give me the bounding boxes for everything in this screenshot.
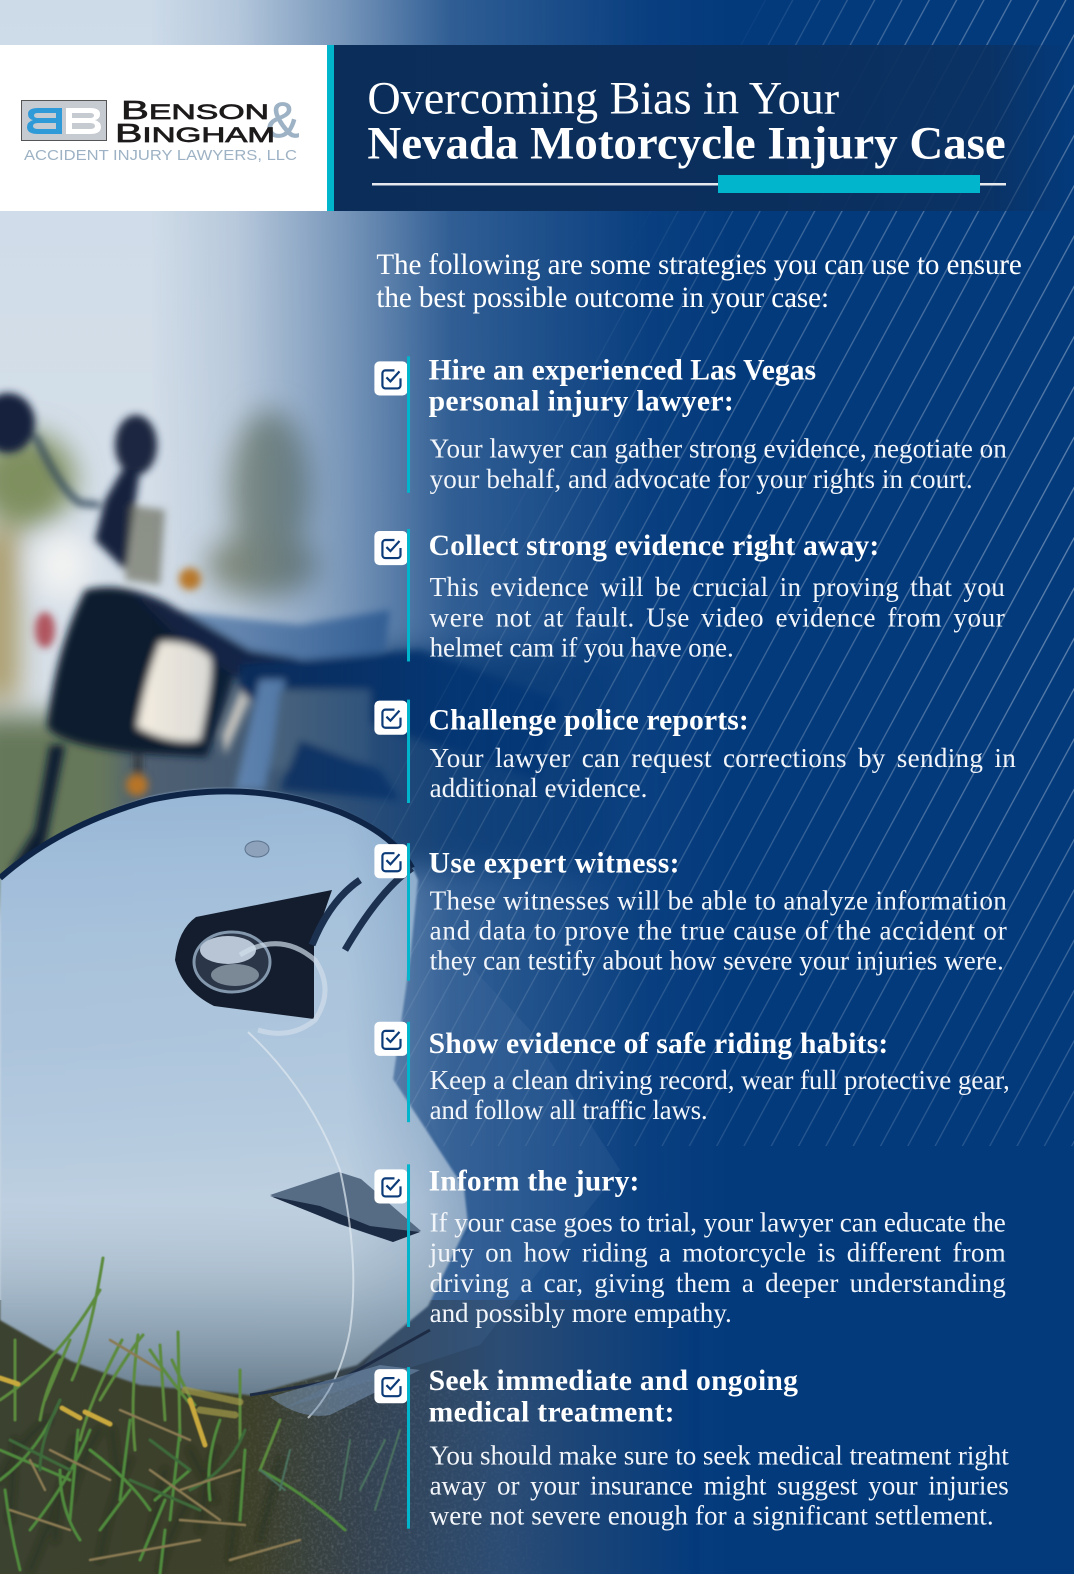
- heading: Show evidence of safe riding habits:: [429, 1028, 888, 1060]
- body text: [430, 1065, 1010, 1125]
- logo mark: [22, 100, 106, 140]
- body text: [430, 743, 1016, 803]
- body text: [429, 1208, 1006, 1328]
- heading: Use expert witness:: [429, 847, 680, 879]
- intro text: [376, 249, 1022, 314]
- photo: helmet: [0, 789, 620, 1418]
- strategy 6: [374, 1164, 1006, 1328]
- icon: checkbox: [374, 844, 408, 878]
- helmet side vent: [270, 1172, 421, 1242]
- icon: checkbox: [374, 701, 408, 735]
- body text: Your lawyer can request corrections by sending in: [430, 743, 1016, 773]
- body text: [430, 885, 1007, 976]
- body text: jury on how riding a motorcycle is different from: [429, 1238, 1006, 1268]
- icon: checkbox: [374, 531, 408, 565]
- strategy 2: [374, 529, 1005, 662]
- intro text: The following are some strategies you can use to ensure: [376, 249, 1022, 281]
- body text: [430, 434, 1007, 494]
- logo name: [115, 95, 275, 148]
- visor edge: [248, 1032, 353, 1418]
- photo: ground: [0, 1300, 700, 1574]
- helmet rim: [0, 791, 412, 878]
- body text: helmet cam if you have one.: [430, 632, 734, 662]
- heading: Seek immediate and ongoing: [429, 1365, 798, 1397]
- body text: and data to prove the true cause of the accident or: [430, 916, 1007, 946]
- body text: and possibly more empathy.: [430, 1298, 732, 1328]
- icon: checkbox: [374, 1369, 408, 1403]
- photo: grass blades: [0, 1258, 400, 1574]
- header panel: [0, 45, 1074, 211]
- icon: checkbox: [374, 361, 408, 395]
- logo tagline: ACCIDENT INJURY LAWYERS, LLC: [24, 147, 297, 164]
- heading: medical treatment:: [429, 1396, 675, 1428]
- decorative diagonal lines: [392, 0, 1074, 1146]
- heading: Collect strong evidence right away:: [429, 530, 879, 562]
- helmet rivet: [245, 841, 269, 857]
- body text: and follow all traffic laws.: [430, 1095, 708, 1125]
- body text: [430, 1440, 1009, 1531]
- heading: Inform the jury:: [429, 1165, 639, 1197]
- heading: Challenge police reports:: [429, 705, 749, 737]
- title: Nevada Motorcycle Injury Case: [367, 118, 1006, 169]
- strategy 5: [374, 1022, 1010, 1125]
- body text: were not severe enough for a significant settlement.: [430, 1501, 994, 1531]
- title: [367, 72, 1006, 169]
- heading: Hire an experienced Las Vegas: [429, 354, 816, 386]
- strategy 7: [374, 1365, 1009, 1531]
- heading: [429, 354, 816, 418]
- heading: [429, 1365, 798, 1428]
- heading: personal injury lawyer:: [429, 386, 734, 418]
- logo name: B ENSON: [121, 95, 269, 125]
- intro text: the best possible outcome in your case:: [376, 282, 829, 314]
- body text: driving a car, giving them a deeper understanding: [430, 1268, 1006, 1298]
- body text: These witnesses will be able to analyze information: [430, 885, 1007, 915]
- icon: checkbox: [374, 1169, 408, 1203]
- body text: were not at fault. Use video evidence from your: [430, 602, 1005, 632]
- icon: checkbox: [374, 1022, 408, 1056]
- body text: This evidence will be crucial in proving that you: [430, 572, 1005, 602]
- logo ampersand: &: [266, 92, 299, 148]
- body text: away or your insurance might suggest your injuries: [430, 1471, 1009, 1501]
- title: Overcoming Bias in Your: [367, 72, 839, 123]
- logo panel: [0, 45, 327, 211]
- body text: Keep a clean driving record, wear full protective gear,: [430, 1065, 1010, 1095]
- helmet face port: [175, 890, 332, 1019]
- strategy 3: [374, 700, 1016, 803]
- title underline: [372, 175, 1006, 193]
- strategy 1: [374, 354, 1007, 494]
- title panel: [334, 45, 1074, 211]
- strategy 4: [374, 843, 1007, 981]
- body text: If your case goes to trial, your lawyer can educate the: [430, 1208, 1006, 1238]
- body text: [430, 572, 1005, 662]
- body text: Your lawyer can gather strong evidence, negotiate on: [430, 434, 1007, 464]
- helmet visor pivot: [194, 932, 270, 992]
- body text: your behalf, and advocate for your rights in court.: [430, 464, 973, 494]
- logo name: B INGHAM: [115, 118, 275, 148]
- body text: additional evidence.: [430, 773, 647, 803]
- body text: they can testify about how severe your injuries were.: [430, 946, 1004, 976]
- body text: You should make sure to seek medical treatment right: [430, 1440, 1009, 1470]
